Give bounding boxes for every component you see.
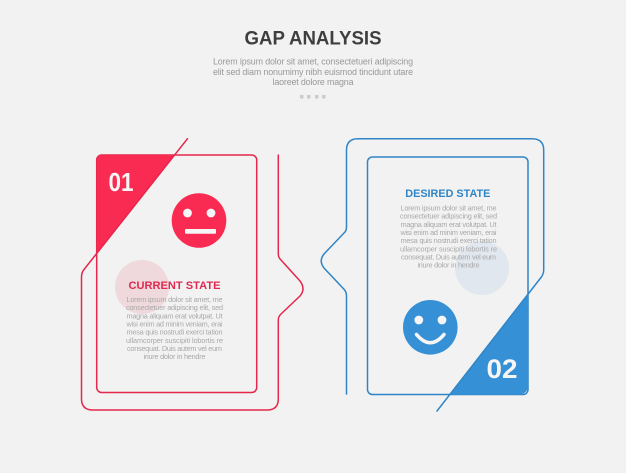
body text: wisi enim ad minim veniam, erai — [400, 228, 497, 237]
body text: wisi enim ad minim veniam, erai — [126, 320, 223, 328]
inner card outline — [368, 157, 528, 394]
decorative circle: pale blue — [455, 241, 509, 295]
outer outline with arrow — [82, 139, 303, 410]
subtitle: Lorem ipsum dolor sit amet, consectetueri adipiscing — [213, 56, 413, 66]
body text: Lorem ipsum dolor sit amet, me — [126, 295, 222, 304]
body text: ullamcorper suscipiti lobortis re — [400, 244, 497, 253]
body text: iriure dolor in hendre — [144, 352, 206, 361]
number corner triangle — [450, 294, 528, 394]
body text: mesa quis nostrudi exerci tation — [126, 328, 222, 337]
pagination dots — [300, 95, 326, 98]
outer outline with arrow — [321, 139, 544, 411]
number corner triangle — [97, 155, 175, 254]
body text: consectetuer adipiscing elit, sed — [126, 303, 223, 312]
subtitle — [213, 56, 413, 87]
body text: ullamcorper suscipiti lobortis re — [126, 336, 223, 345]
header — [213, 28, 413, 98]
title: GAP ANALYSIS — [244, 28, 382, 50]
body text: consequat. Duis autem vel eum — [401, 252, 496, 262]
body text: Lorem ipsum dolor sit amet, me — [400, 204, 496, 212]
inner card outline — [97, 155, 257, 392]
panel: current state — [82, 139, 303, 410]
body text: consequat. Duis autem vel eum — [127, 344, 222, 353]
heading: desired state: DESIRED STATE — [405, 188, 490, 200]
body text: magna aliquam erat volutpat. Ut — [126, 311, 222, 320]
body text: mesa quis nostrudi exerci tation — [400, 236, 496, 245]
icon: smiling face — [403, 300, 458, 355]
decorative circle: pink — [115, 260, 169, 314]
subtitle: elit sed diam nonumimy nibh euismod tincidunt utare — [213, 67, 413, 77]
panel: desired state — [321, 139, 544, 411]
subtitle: laoreet dolore magna — [272, 77, 354, 87]
number 01: 01 — [108, 167, 134, 197]
icon: neutral face — [172, 193, 226, 248]
body text: magna aliquam erat volutpat. Ut — [400, 220, 496, 229]
body text: iriure dolor in hendre — [418, 261, 480, 270]
body text — [126, 295, 223, 361]
body text: consectetuer adipiscing elit, sed — [400, 212, 497, 221]
heading: current state: CURRENT STATE — [128, 280, 220, 292]
number 02: 02 — [486, 354, 518, 384]
body text — [400, 204, 497, 270]
